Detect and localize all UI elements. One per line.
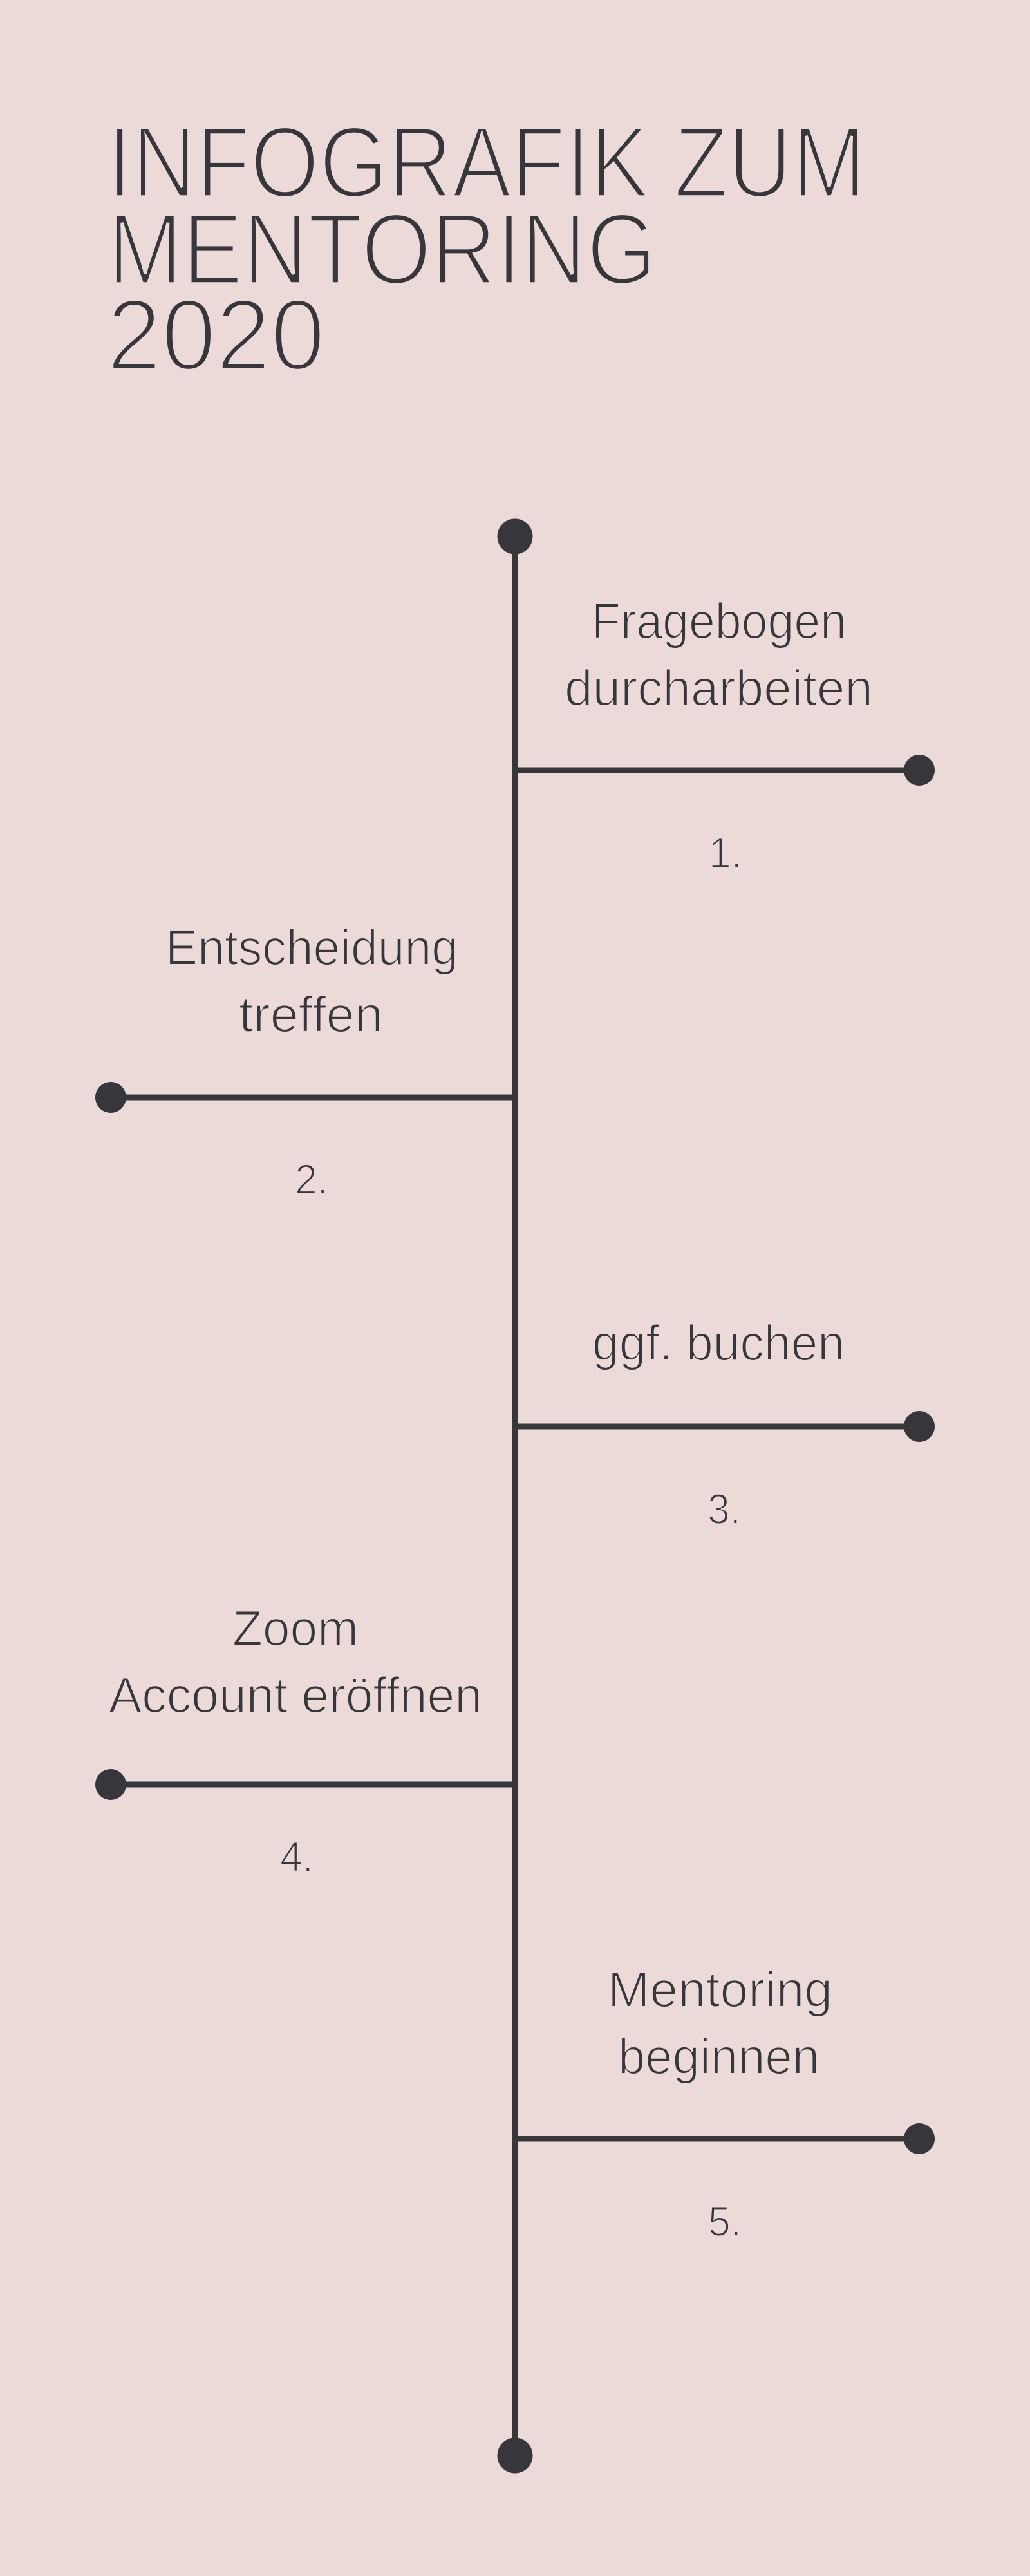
title: MENTORING [108, 193, 657, 306]
step 2 connector [95, 1082, 515, 1113]
step 1 number: 1. [709, 829, 742, 876]
step 1 label [565, 592, 873, 716]
step 2 label [165, 919, 458, 1043]
step 4 label: Zoom [232, 1600, 359, 1656]
step 5 label: Mentoring [608, 1961, 832, 2018]
step 5 number: 5. [708, 2197, 742, 2245]
step 3 [515, 1314, 935, 1533]
step 4 label: Account eröffnen [109, 1667, 482, 1723]
step 5 [515, 1961, 935, 2245]
step 4 label [109, 1600, 482, 1723]
step 2 label: treffen [239, 986, 383, 1043]
step 3 label: ggf. buchen [592, 1314, 845, 1371]
step 1 label: durcharbeiten [565, 659, 873, 716]
step 2 label: Entscheidung [165, 919, 458, 976]
title: INFOGRAFIK ZUM [108, 106, 866, 219]
step 5 label: beginnen [618, 2028, 819, 2085]
step 1 connector [515, 755, 935, 786]
step 5 label [608, 1961, 832, 2085]
step 3 connector [515, 1411, 935, 1442]
step 5 connector [515, 2123, 935, 2154]
step 3 number: 3. [707, 1485, 741, 1533]
step 1 [515, 592, 935, 876]
step 2 number: 2. [295, 1155, 328, 1203]
step 2 [95, 919, 515, 1203]
timeline: vertical axis with end dots [497, 519, 533, 2473]
title: 2020 [107, 279, 325, 392]
step 4 number: 4. [280, 1833, 314, 1880]
step 1 label: Fragebogen [592, 592, 847, 649]
step 4 [95, 1600, 515, 1880]
title [107, 106, 866, 392]
step 4 connector [95, 1769, 515, 1800]
